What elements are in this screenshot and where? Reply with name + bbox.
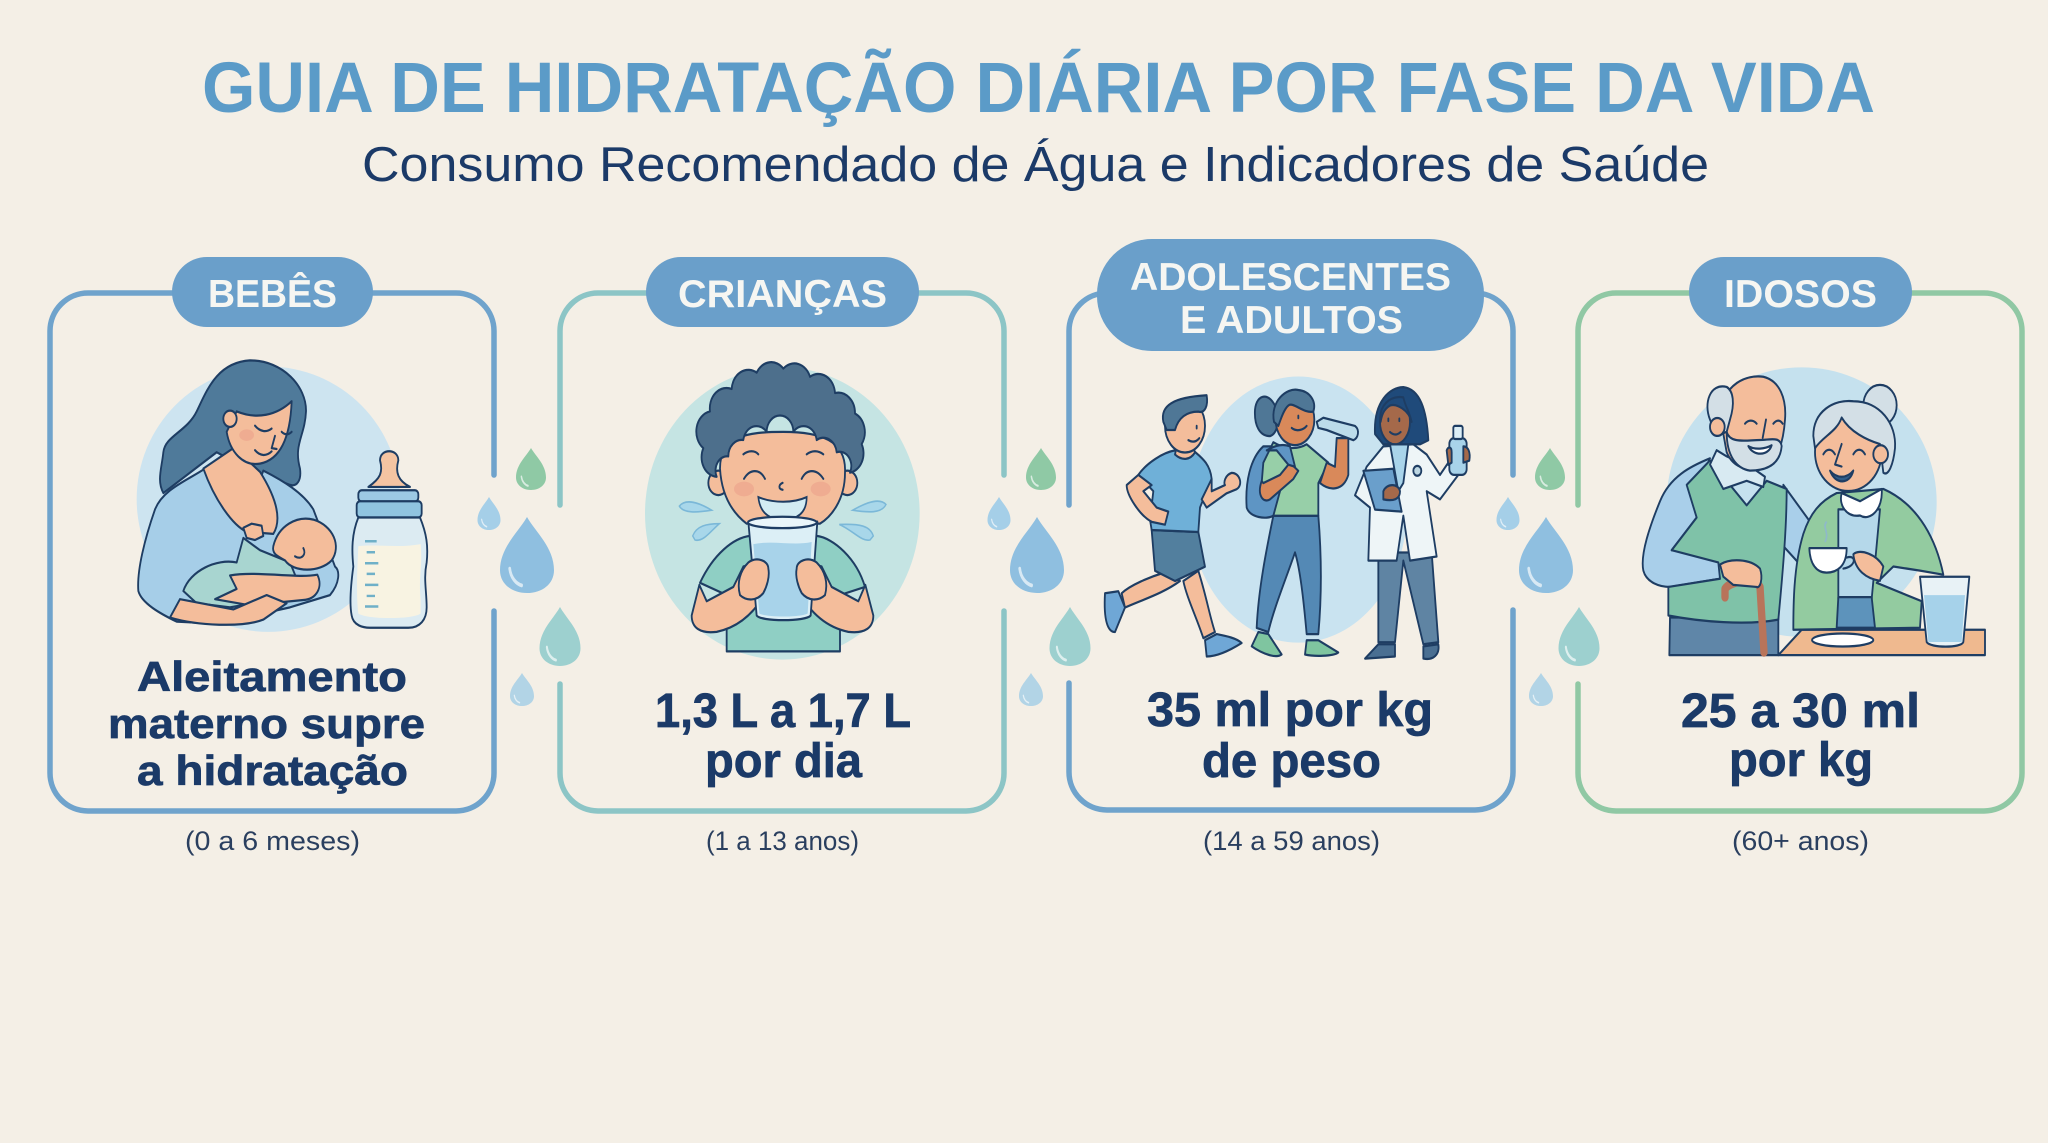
main text: 1,3 L a 1,7 L [655, 685, 911, 738]
illustration: runner, student and doctor [1105, 377, 1470, 659]
panel: adolescentes e adultos [1069, 239, 1513, 856]
badge: adolescentes e adultos: E ADULTOS [1180, 299, 1403, 342]
badge: adolescentes e adultos [1097, 239, 1484, 351]
main text: por kg [1729, 734, 1873, 787]
panel: bebês [50, 257, 494, 856]
age range: (60+ anos) [1732, 826, 1869, 856]
main text: materno supre [108, 700, 425, 747]
main text: Aleitamento [137, 653, 407, 700]
age range: (0 a 6 meses) [185, 826, 360, 856]
illustration: elderly couple [1643, 367, 1985, 655]
droplets between adolescentes and idosos [1496, 448, 1600, 706]
age range: (1 a 13 anos) [706, 826, 859, 856]
main text: a hidratação [137, 747, 408, 794]
badge: bebês: BEBÊS [208, 272, 337, 316]
badge: bebês [172, 257, 373, 327]
main text: 35 ml por kg [1147, 684, 1433, 737]
badge: adolescentes e adultos: ADOLESCENTES [1130, 256, 1451, 299]
subtitle: Consumo Recomendado de Água e Indicadores de Saúde [362, 138, 1709, 192]
illustration: mother breastfeeding and bottle [137, 360, 427, 632]
main text [1681, 685, 1920, 787]
droplets between bebês and crianças [478, 448, 580, 706]
illustration: child drinking water [645, 362, 920, 660]
badge: crianças: CRIANÇAS [678, 273, 887, 316]
main text [655, 685, 911, 788]
badge: idosos: IDOSOS [1724, 273, 1877, 316]
age range: (14 a 59 anos) [1203, 826, 1380, 856]
main text [108, 653, 425, 794]
title: GUIA DE HIDRATAÇÃO DIÁRIA POR FASE DA VIDA [202, 49, 1875, 128]
main text: 25 a 30 ml [1681, 685, 1920, 738]
main text [1147, 684, 1433, 788]
panel: crianças [560, 257, 1004, 856]
badge: crianças [646, 257, 919, 327]
main text: por dia [705, 735, 862, 788]
panel: idosos [1578, 257, 2022, 856]
main text: de peso [1202, 735, 1381, 788]
badge: idosos [1689, 257, 1912, 327]
droplets between crianças and adolescentes [988, 448, 1090, 706]
